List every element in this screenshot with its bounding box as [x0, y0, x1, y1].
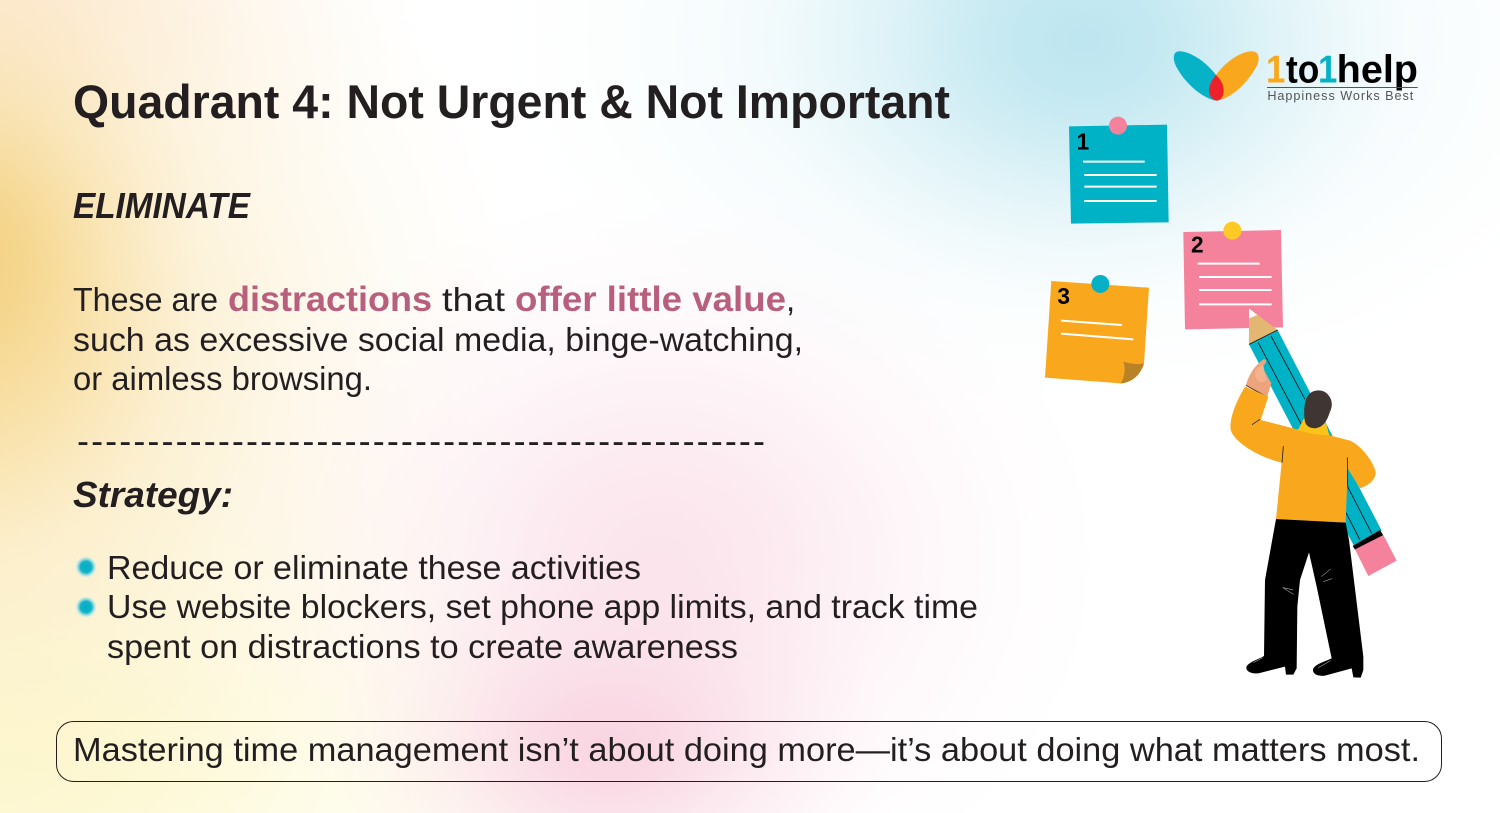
title: Quadrant 4: Not Urgent & Not Important	[73, 75, 950, 128]
sticky note 1: 1	[1077, 128, 1089, 154]
logo wordmark	[1266, 47, 1418, 91]
collar	[1298, 418, 1329, 435]
bullet text 2: Use website blockers, set phone app limits, and track time	[107, 588, 978, 625]
callout: closing message	[56, 722, 1442, 782]
text block: description: that	[442, 281, 505, 318]
bullet icon 2	[76, 596, 96, 618]
logo icon: butterfly	[1174, 51, 1259, 101]
sweater	[1230, 387, 1376, 523]
sticky note 3: 3	[1057, 283, 1070, 309]
logo	[1174, 47, 1418, 103]
illustration: person holding pencil	[1230, 308, 1397, 678]
heading: strategy: Strategy:	[73, 474, 233, 515]
sticky note 1	[1069, 117, 1169, 224]
sticky note 2: 2	[1191, 232, 1204, 258]
logo wordmark: 1	[1318, 47, 1337, 91]
logo wordmark: to	[1286, 47, 1319, 91]
bullet list: strategy	[76, 549, 978, 665]
hair	[1304, 390, 1332, 428]
sticky notes and logo	[1045, 47, 1418, 383]
sticky note 3	[1045, 275, 1149, 383]
callout: closing message: Mastering time management isn’t about doing more—it’s about doing what matters most.	[73, 731, 1420, 768]
text block: description	[73, 280, 803, 397]
trousers	[1246, 519, 1363, 678]
text block: description: such as excessive social media, binge-watching,	[73, 321, 803, 358]
bullet text 2	[107, 588, 978, 665]
logo wordmark: help	[1337, 47, 1418, 91]
heading: eliminate: ELIMINATE	[73, 185, 251, 226]
bullet icon 1	[76, 556, 96, 578]
sticky note 2	[1183, 222, 1283, 329]
pencil	[1249, 308, 1397, 576]
logo wordmark: 1	[1266, 47, 1285, 91]
text block: description: offer little value	[515, 280, 786, 319]
text block: description: These are	[73, 281, 218, 318]
text block: description: distractions	[228, 280, 432, 319]
text block: description: ,	[786, 281, 795, 318]
dashed divider: -------------------------------------------------	[77, 420, 765, 461]
bullet text 1: Reduce or eliminate these activities	[107, 549, 641, 586]
bullet text 2: spent on distractions to create awareness	[107, 628, 738, 665]
hand	[1246, 359, 1271, 398]
text block: description: or aimless browsing.	[73, 360, 372, 397]
logo tagline: Happiness Works Best	[1267, 89, 1414, 103]
